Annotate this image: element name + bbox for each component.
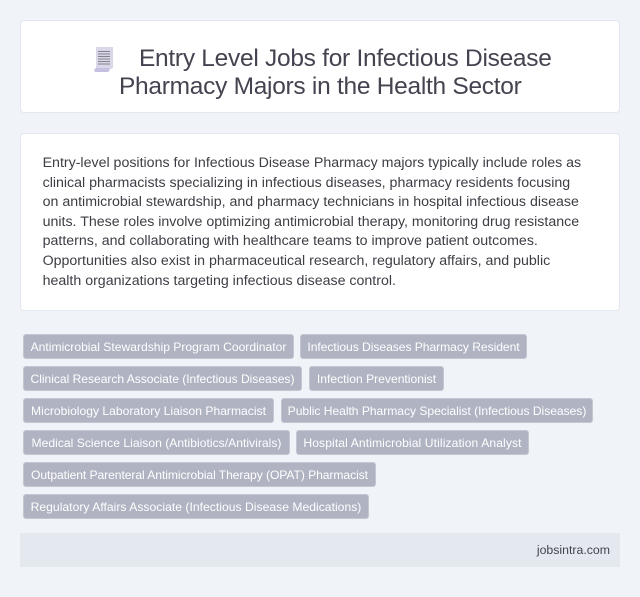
footer text: jobsintra.com: [537, 543, 610, 557]
description text: clinical pharmacists specializing in infectious diseases, pharmacy residents focusing: [43, 175, 570, 191]
tag: [23, 462, 376, 487]
title text: [119, 45, 552, 100]
description text: health organizations targeting infectious disease control.: [43, 273, 396, 289]
description text: Entry-level positions for Infectious Disease Pharmacy majors typically include roles as: [43, 155, 581, 171]
title text: Pharmacy Majors in the Health Sector: [119, 73, 522, 100]
job tags: [23, 334, 593, 519]
tag: [300, 334, 527, 359]
tag: [296, 430, 529, 455]
description text: units. These roles involve optimizing antimicrobial therapy, monitoring drug resistance: [43, 214, 579, 230]
description text: patterns, and collaborating with healthcare teams to improve patient outcomes.: [43, 233, 538, 249]
tag: [23, 430, 290, 455]
description text: on antimicrobial stewardship, and pharmacy technicians in hospital infectious disease: [43, 194, 579, 210]
tag: Infectious Diseases Pharmacy Resident: [307, 340, 520, 354]
description text: Opportunities also exist in pharmaceutical research, regulatory affairs, and public: [43, 253, 550, 269]
tag: Antimicrobial Stewardship Program Coordinator: [31, 340, 286, 354]
description text: [43, 155, 581, 289]
tag: [23, 398, 274, 423]
tag: Public Health Pharmacy Specialist (Infectious Diseases): [288, 404, 586, 418]
tag: Outpatient Parenteral Antimicrobial Therapy (OPAT) Pharmacist: [31, 468, 368, 482]
tag: [23, 366, 302, 391]
tag: Medical Science Liaison (Antibiotics/Antivirals): [32, 436, 281, 450]
footer bar: [20, 533, 620, 567]
icon: document scroll: [94, 47, 113, 72]
tag: Regulatory Affairs Associate (Infectious Disease Medications): [31, 500, 361, 514]
title text: Entry Level Jobs for Infectious Disease: [139, 45, 552, 72]
tag: [309, 366, 444, 391]
tag: Microbiology Laboratory Liaison Pharmacist: [31, 404, 266, 418]
tag: Hospital Antimicrobial Utilization Analyst: [303, 436, 522, 450]
tag: [281, 398, 593, 423]
tag: Infection Preventionist: [317, 372, 436, 386]
tag: [23, 494, 369, 519]
tag: Clinical Research Associate (Infectious Diseases): [31, 372, 294, 386]
title card: [20, 20, 620, 113]
tag: [23, 334, 294, 359]
description panel: [20, 133, 620, 311]
